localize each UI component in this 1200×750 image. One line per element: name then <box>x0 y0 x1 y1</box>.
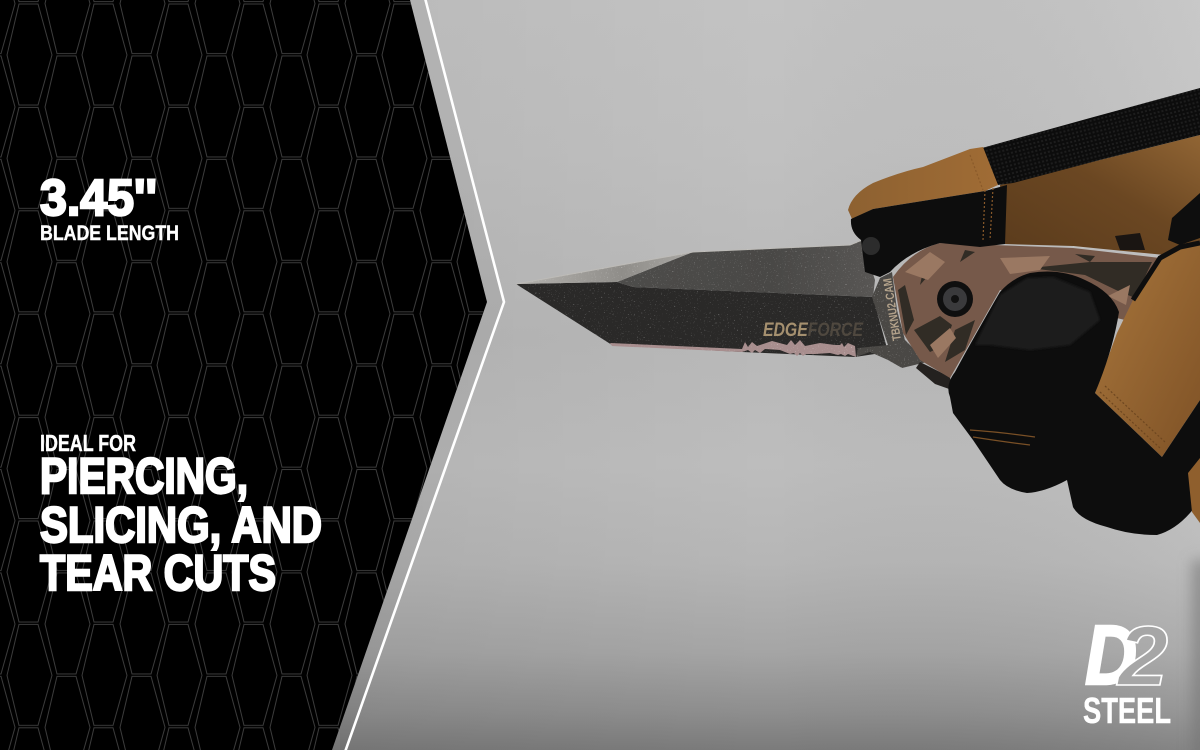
blade upper bevel <box>617 240 875 297</box>
thumb stitching <box>1100 386 1165 448</box>
handle scale <box>893 243 1160 378</box>
text block: ideal uses <box>40 430 322 601</box>
lower glove fingers black <box>948 272 1200 535</box>
white chevron line <box>345 0 504 750</box>
blade clip point <box>516 252 693 284</box>
outlined numeral 2: 2 <box>1116 609 1168 703</box>
blade tang <box>856 272 927 368</box>
heading line 2: SLICING, AND <box>40 497 322 553</box>
glove back of hand <box>1000 135 1200 255</box>
heading line 1: PIERCING, <box>40 448 248 504</box>
light camo patches <box>905 252 1130 358</box>
intro line: IDEAL FOR <box>40 430 136 456</box>
thumb dark rim <box>1133 243 1200 300</box>
serrated edge <box>610 340 856 357</box>
logo mark D2 <box>1085 608 1168 703</box>
stat: blade length <box>40 169 179 245</box>
logo: D2 steel <box>1083 608 1171 731</box>
stat value: 3.45'' <box>40 169 157 226</box>
lower liner <box>916 362 952 390</box>
handle screw <box>937 281 973 317</box>
orange finger stitching <box>970 430 1035 445</box>
logo word steel: STEEL <box>1083 690 1171 731</box>
dark wrist panel <box>1168 193 1200 245</box>
camo patches <box>898 250 1152 372</box>
gray band beside chevron <box>332 0 504 750</box>
panel: black chevron with hexagon pattern <box>0 0 487 750</box>
knife handle with camo scales <box>893 243 1160 390</box>
index finger black underside <box>851 185 1007 277</box>
textured finger highlight <box>975 277 1100 350</box>
knife held in gloved hand <box>516 88 1200 535</box>
dark strap on glove <box>1115 233 1145 250</box>
pivot rivet <box>862 237 880 255</box>
blade lower flat <box>516 282 888 357</box>
blade spine highlight <box>516 240 862 284</box>
brand mark on blade: EDGEFORCE <box>763 320 864 341</box>
far right tan fingertip <box>1188 458 1200 523</box>
stitch lines <box>970 155 993 240</box>
thumb tan panel <box>1095 243 1200 457</box>
knife blade <box>516 240 927 368</box>
heading line 3: TEAR CUTS <box>40 545 276 601</box>
model mark on tang: TBKNU2-CAM <box>880 277 904 342</box>
glove black knit <box>982 88 1200 185</box>
stat label: BLADE LENGTH <box>40 221 179 245</box>
index fingertip tan <box>848 147 998 219</box>
gap through the fingers <box>1073 240 1113 249</box>
solid letter D: D <box>1085 608 1137 702</box>
